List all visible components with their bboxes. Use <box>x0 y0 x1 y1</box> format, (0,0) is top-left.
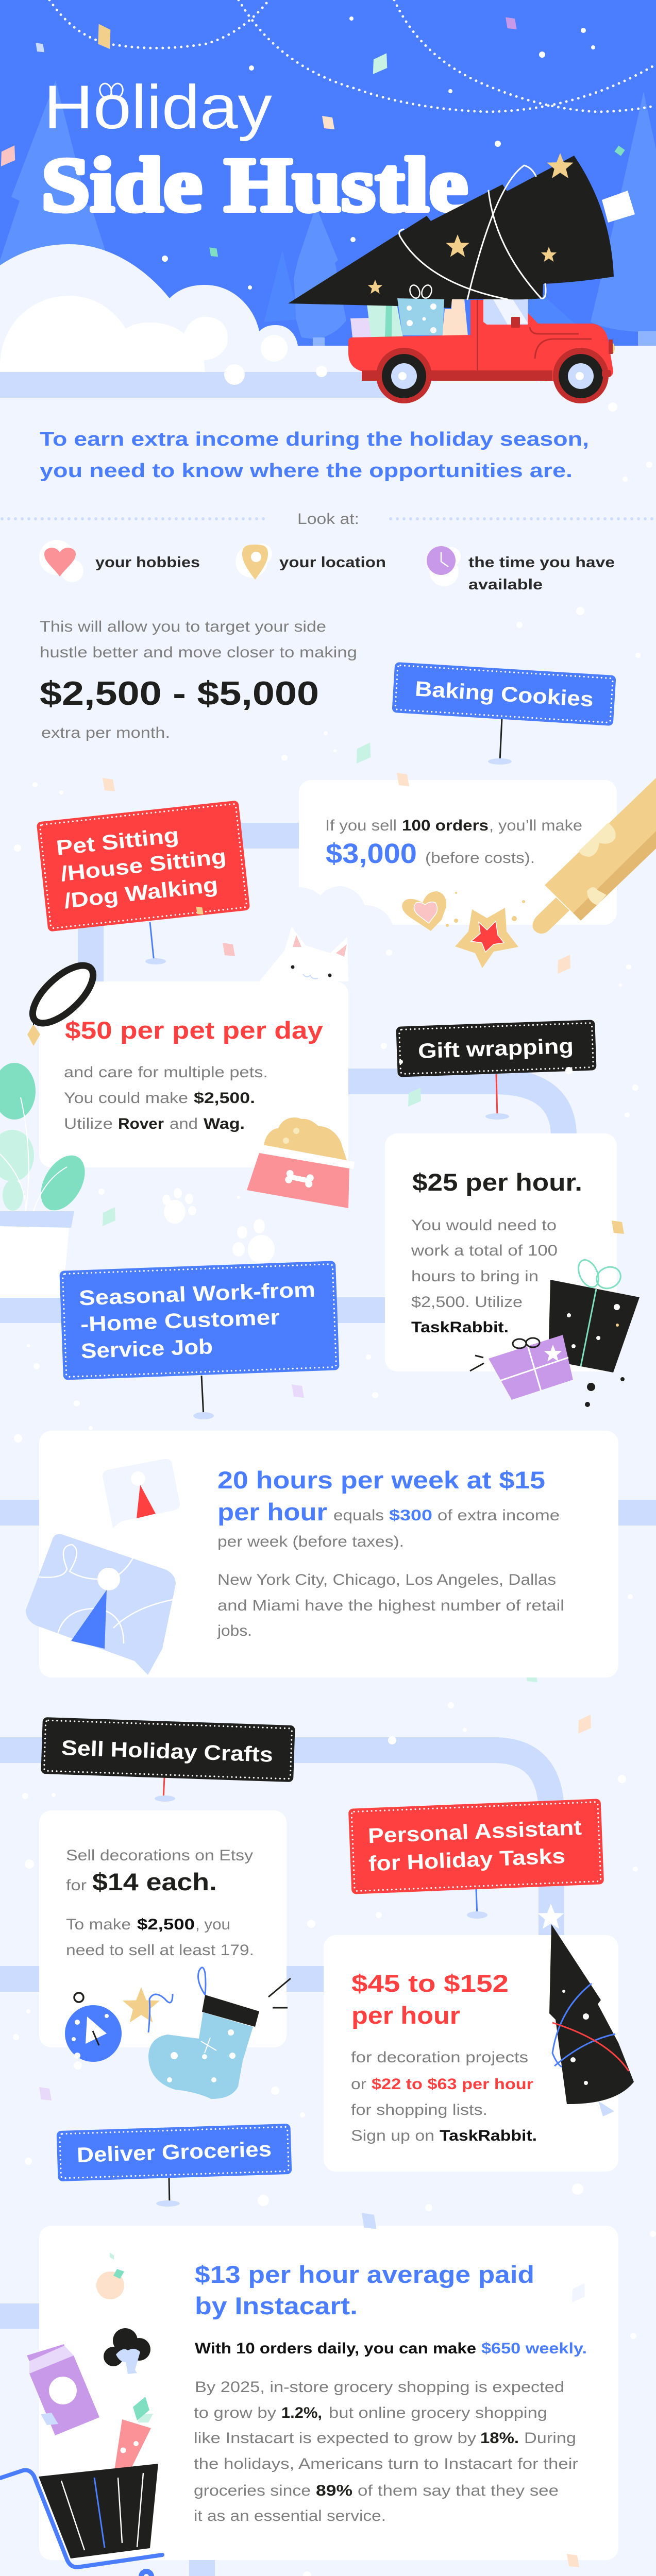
sign: personal assistant: Personal Assistant <box>367 1816 582 1848</box>
panel: pet sitting: and care for multiple pets. <box>64 1064 268 1081</box>
sign: personal assistant <box>348 1799 604 1919</box>
sign: gift wrapping: Gift wrapping <box>417 1034 574 1063</box>
sign: baking cookies: Baking Cookies <box>414 676 594 711</box>
hero confetti and snow <box>1 16 625 290</box>
icon: broccoli <box>104 2328 150 2374</box>
panel: deliver groceries: 18%. <box>480 2430 519 2447</box>
tree strings <box>399 165 546 299</box>
sign: seasonal customer service job: -Home Customer <box>80 1305 280 1336</box>
intro heading <box>40 429 589 482</box>
sign: gift wrapping <box>396 1020 597 1120</box>
panel: deliver groceries: it as an essential service. <box>194 2507 386 2524</box>
title: Side Hustle: Side Hustle <box>41 142 468 228</box>
icon: gold star <box>123 1987 160 2023</box>
intro heading: you need to know where the opportunities are. <box>40 460 573 482</box>
panel: pet sitting: $50 per pet per day <box>65 1016 323 1044</box>
gifts in truck bed <box>350 296 468 337</box>
income summary text: This will allow you to target your side <box>40 618 326 635</box>
sign: pet sitting: /House Sitting <box>59 844 227 886</box>
icon: decorated tree <box>537 1904 634 2116</box>
sign: sell holiday crafts <box>41 1717 295 1802</box>
panel: sell holiday crafts: , you <box>195 1916 230 1933</box>
item: the time you have available <box>427 546 615 593</box>
income summary text <box>40 618 357 741</box>
panel: deliver groceries: the holidays, Americans turn to Instacart for their <box>194 2455 578 2472</box>
item: your location <box>236 544 386 580</box>
icon: carrot <box>114 2397 153 2470</box>
panel: deliver groceries: 89% <box>316 2482 352 2499</box>
panel: pet sitting <box>23 927 355 1208</box>
panel: personal assistant: per hour <box>351 2002 460 2029</box>
panel: gift wrapping: $2,500. Utilize <box>411 1294 523 1311</box>
panel: baking cookies: , you’ll make <box>489 817 582 834</box>
icon: red truck with tree and gifts <box>288 153 635 403</box>
look at label with dotted rules: Look at: <box>297 511 359 528</box>
panel: seasonal work stats: $300 <box>389 1507 432 1524</box>
panel: gift wrapping: work a total of 100 <box>411 1242 558 1259</box>
hero banner <box>0 0 656 453</box>
panel: deliver groceries: of them say that they see <box>358 2482 559 2499</box>
panel: baking cookies: $3,000 <box>326 838 417 869</box>
panel: sell holiday crafts: $14 each. <box>92 1868 217 1895</box>
panel: seasonal work stats <box>26 1431 618 1677</box>
truck wheels <box>382 354 603 398</box>
panel: baking cookies: If you sell <box>325 817 397 834</box>
panel: deliver groceries: but online grocery shopping <box>329 2404 547 2421</box>
panel: pet sitting: Wag. <box>204 1115 245 1132</box>
panel: pet sitting: You could make <box>64 1090 188 1107</box>
item: your hobbies <box>39 540 200 582</box>
item: the time you have available: available <box>468 577 543 593</box>
icon: potted plant <box>0 1063 94 1298</box>
panel: gift wrapping: TaskRabbit. <box>411 1319 509 1336</box>
item: your hobbies: your hobbies <box>95 554 200 571</box>
panel: sell holiday crafts: Sell decorations on Etsy <box>66 1847 253 1864</box>
panel: personal assistant: $45 to $152 <box>351 1970 509 1997</box>
panel: baking cookies: 100 orders <box>402 817 489 834</box>
income summary text: hustle better and move closer to making <box>40 644 357 661</box>
panel: personal assistant: for shopping lists. <box>351 2102 487 2119</box>
item: your location: your location <box>279 554 386 571</box>
panel: seasonal work stats: equals <box>333 1507 384 1524</box>
panel: deliver groceries: by Instacart. <box>195 2292 358 2319</box>
panel: personal assistant <box>324 1904 634 2172</box>
income summary text: extra per month. <box>41 724 170 741</box>
panel: deliver groceries: During <box>524 2430 576 2447</box>
panel: sell holiday crafts: To make <box>66 1916 131 1933</box>
panel: seasonal work stats: per hour <box>217 1498 327 1526</box>
panel: baking cookies: (before costs). <box>425 850 535 867</box>
panel: seasonal work stats: and Miami have the highest number of retail <box>217 1597 564 1614</box>
panel: seasonal work stats: jobs. <box>217 1622 252 1639</box>
string lights <box>49 0 656 112</box>
panel: personal assistant: TaskRabbit. <box>440 2127 537 2144</box>
panel: pet sitting: and <box>170 1115 198 1132</box>
icon: paw prints <box>162 1188 275 1264</box>
icon: dog bowl <box>247 1117 355 1208</box>
panel: personal assistant: or <box>351 2076 366 2093</box>
icon: gifts <box>470 1257 640 1407</box>
panel: personal assistant: for decoration projects <box>351 2049 528 2066</box>
icon: location bubble <box>103 1459 180 1528</box>
sign: personal assistant: for Holiday Tasks <box>368 1844 566 1875</box>
icon: stocking <box>148 1968 291 2099</box>
cloud notch <box>299 886 393 927</box>
roads <box>0 836 656 2576</box>
crumbs <box>446 892 525 927</box>
title: Holiday: Holiday <box>44 73 272 142</box>
icon: heart <box>44 548 76 577</box>
panel: gift wrapping: You would need to <box>411 1217 557 1234</box>
panel: sell holiday crafts: need to sell at least 179. <box>66 1942 254 1959</box>
blue gift <box>397 284 444 335</box>
item: the time you have available: the time you have <box>468 554 615 571</box>
icon: star cookie <box>455 908 518 968</box>
sign: seasonal customer service job: Seasonal Work-from <box>78 1278 316 1310</box>
icon: heart cookie <box>402 891 446 931</box>
panel: sell holiday crafts <box>39 1810 287 2047</box>
tree trunk <box>602 191 635 223</box>
panel: deliver groceries <box>0 2213 618 2576</box>
panel: pet sitting: Utilize <box>64 1115 113 1132</box>
panel: deliver groceries: By 2025, in-store grocery shopping is expected <box>195 2379 564 2396</box>
sign: pet sitting: /Dog Walking <box>63 873 219 913</box>
panel: deliver groceries: $13 per hour average paid <box>195 2261 534 2288</box>
intro heading: To earn extra income during the holiday season, <box>40 429 589 450</box>
sign: deliver groceries: Deliver Groceries <box>76 2137 272 2167</box>
sign: deliver groceries <box>57 2124 292 2207</box>
panel: sell holiday crafts: for <box>66 1877 87 1894</box>
icon: collar <box>23 956 103 1046</box>
confetti <box>39 742 591 2576</box>
panel: pet sitting: Rover <box>118 1115 164 1132</box>
panel: deliver groceries: groceries since <box>194 2482 311 2499</box>
icon: shopping cart <box>0 2464 162 2576</box>
sign: sell holiday crafts: Sell Holiday Crafts <box>61 1736 274 1767</box>
panel: gift wrapping <box>385 1133 640 1407</box>
panel: personal assistant: Sign up on <box>351 2127 434 2144</box>
panel: seasonal work stats: of extra income <box>438 1507 560 1524</box>
icon: rolling pin <box>532 778 656 934</box>
panel: deliver groceries: $650 weekly. <box>481 2340 587 2357</box>
panel: pet sitting: $2,500. <box>194 1090 255 1107</box>
panel: gift wrapping: $25 per hour. <box>412 1168 582 1196</box>
panel: seasonal work stats: 20 hours per week at $15 <box>217 1466 545 1494</box>
panel: baking cookies <box>299 773 656 968</box>
sign: pet sitting <box>37 800 250 964</box>
sign: seasonal customer service job <box>59 1261 340 1419</box>
sign: seasonal customer service job: Service Job <box>80 1334 213 1363</box>
panel: seasonal work stats: per week (before taxes). <box>217 1533 404 1550</box>
christmas tree on roof <box>288 156 614 308</box>
panel: personal assistant: $22 to $63 per hour <box>372 2076 533 2093</box>
panel: deliver groceries: 1.2%, <box>281 2404 322 2421</box>
icon: milk carton <box>27 2344 99 2435</box>
background pine trees <box>0 80 656 346</box>
panel: seasonal work stats: New York City, Chicago, Los Angeles, Dallas <box>217 1571 556 1588</box>
sign: baking cookies <box>392 662 616 765</box>
icon: map <box>26 1534 176 1675</box>
panel: deliver groceries: With 10 orders daily, you can make <box>195 2340 476 2357</box>
income summary text: $2,500 - $5,000 <box>40 674 319 712</box>
snow hills <box>0 244 656 453</box>
panel: deliver groceries: to grow by <box>194 2404 276 2421</box>
icon: peach <box>96 2252 124 2299</box>
truck body <box>348 300 613 381</box>
icon: cat <box>259 927 348 981</box>
sign: pet sitting: Pet Sitting <box>55 823 180 860</box>
panel: sell holiday crafts: $2,500 <box>137 1916 195 1933</box>
icon: clock <box>427 546 456 575</box>
icon: pin <box>242 545 268 580</box>
panel: deliver groceries: like Instacart is expected to grow by <box>194 2430 476 2447</box>
icon: ornament <box>65 1993 122 2062</box>
panel: gift wrapping: hours to bring in <box>411 1268 539 1285</box>
